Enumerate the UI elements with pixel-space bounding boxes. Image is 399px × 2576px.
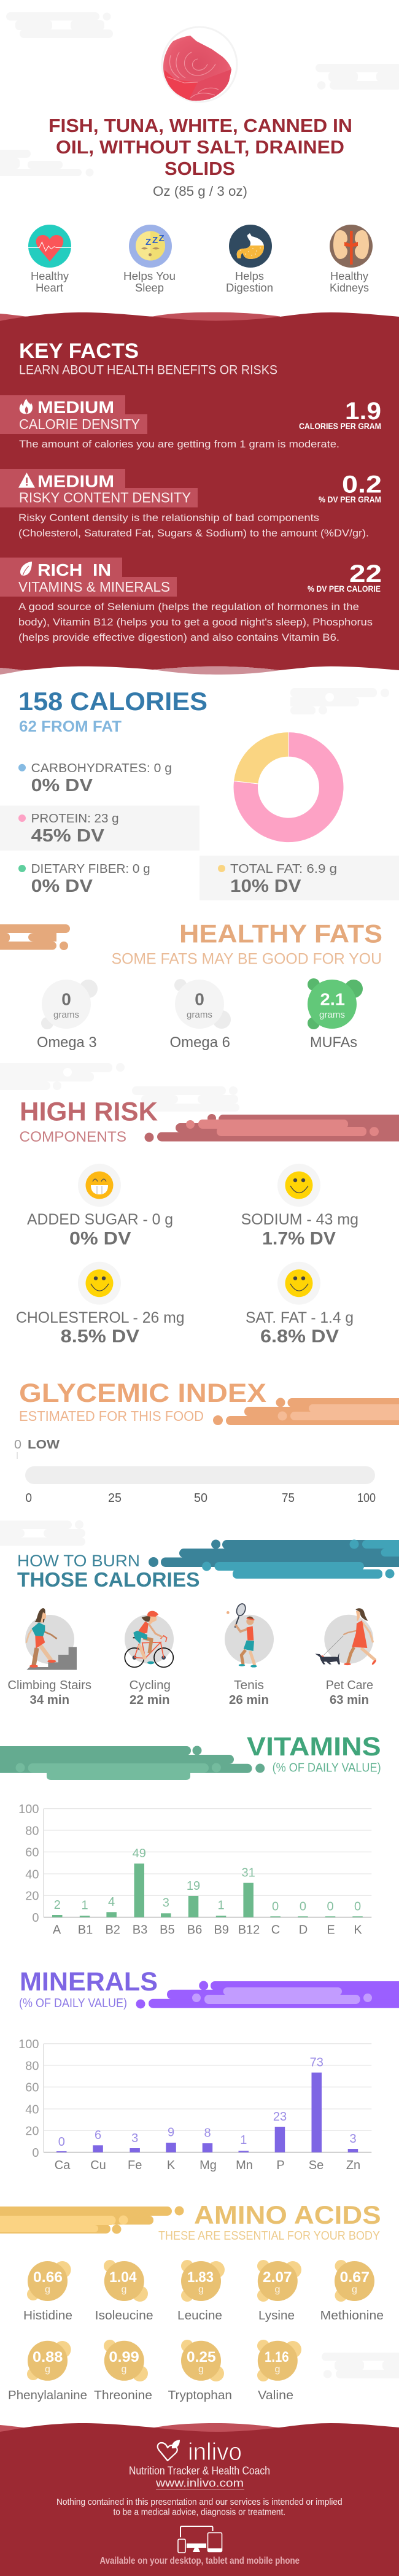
- title: [48, 115, 352, 179]
- title: OIL, WITHOUT SALT, DRAINED: [56, 136, 344, 158]
- item: saturated fat: [246, 1262, 354, 1347]
- icon: helps you sleep: Z: [152, 235, 158, 246]
- item: added sugar: ADDED SUGAR - 0 g: [27, 1211, 173, 1228]
- panel: how to burn those calories: [7, 1539, 399, 1707]
- chart: vitamins bar chart: 49: [133, 1847, 146, 1860]
- item: tryptophan: g: [198, 2364, 204, 2375]
- item: leucine: [177, 2260, 225, 2323]
- chart: vitamins bar chart: D: [299, 1924, 308, 1937]
- chart: minerals bar chart: 6: [95, 2129, 101, 2142]
- background cloud: calories: [290, 688, 389, 714]
- chart: vitamins bar chart: 40: [25, 1868, 39, 1881]
- chart: minerals bar chart: 0: [32, 2146, 39, 2160]
- fact: rich in vitamins and minerals: body), Vitamin B12 (helps you to get a good night's sleep), Phosphorus: [18, 616, 373, 628]
- heading: glycemic index: [19, 1379, 266, 1424]
- decoration: vitamins bars: [0, 1746, 265, 1780]
- item: omega 6: grams: [187, 1010, 212, 1020]
- fact: rich in vitamins and minerals: [0, 557, 382, 643]
- footer tagline: [129, 2465, 270, 2489]
- item: histidine: Histidine: [23, 2309, 72, 2323]
- chart: minerals bar chart: K: [167, 2159, 176, 2172]
- chart: calorie donut: [233, 732, 344, 843]
- item: omega 6: 0: [195, 989, 204, 1009]
- activity: climbing stairs: [7, 1608, 91, 1707]
- item: leucine: Leucine: [177, 2309, 222, 2323]
- item: methionine: Methionine: [320, 2309, 384, 2323]
- row: dietary fiber: [18, 862, 150, 896]
- activity: cycling: Cycling: [130, 1679, 171, 1692]
- benefit labels: Sleep: [135, 282, 164, 294]
- availability note: Available on your desktop, tablet and mobile phone: [99, 2556, 300, 2566]
- title: SOLIDS: [165, 158, 235, 179]
- background clouds: header: [0, 12, 399, 177]
- chart: minerals bar chart: Cu: [90, 2159, 106, 2172]
- chart: vitamins bar chart: 0: [300, 1900, 306, 1914]
- heading: glycemic index: ESTIMATED FOR THIS FOOD: [19, 1408, 204, 1424]
- logo: inlivo: inlivo: [188, 2439, 242, 2466]
- food image: tuna: [162, 27, 237, 104]
- heading: minerals: [19, 1967, 158, 2010]
- item: mufas: MUFAs: [310, 1034, 357, 1051]
- activity: climbing stairs: Climbing Stairs: [7, 1679, 91, 1692]
- background clouds: high risk: [0, 1063, 239, 1112]
- activity: pet care: [315, 1608, 377, 1707]
- fact: risky content density: (Cholesterol, Saturated Fat, Sugars & Sodium) to the amount (%DV/gr).: [18, 527, 369, 539]
- item: lysine: g: [275, 2284, 280, 2295]
- chart: minerals bar chart: Mn: [236, 2159, 253, 2172]
- panel: high risk components: [16, 1097, 399, 1347]
- chart: vitamins bar chart: C: [271, 1924, 280, 1937]
- chart: vitamins bar chart: B1: [78, 1924, 93, 1937]
- icon: healthy kidneys: [330, 225, 373, 268]
- item: mufas: 2.1: [320, 989, 345, 1009]
- item: isoleucine: 1.04: [109, 2269, 137, 2286]
- chart: vitamins bar chart: B9: [214, 1924, 229, 1937]
- fact: risky content density: [0, 469, 382, 539]
- benefit icons row: [28, 225, 373, 294]
- panel: key facts: [0, 312, 399, 675]
- decoration: healthy fats bars: [0, 924, 70, 950]
- item: phenylalanine: Phenylalanine: [8, 2389, 87, 2402]
- item: tryptophan: Tryptophan: [168, 2389, 232, 2402]
- icon: healthy heart: [28, 225, 71, 268]
- chart: vitamins bar chart: E: [327, 1924, 335, 1937]
- disclaimer: to be a medical advice, diagnosis or treatment.: [113, 2507, 285, 2518]
- item: threonine: 0.99: [109, 2349, 139, 2365]
- item: threonine: Threonine: [94, 2389, 152, 2402]
- item: omega 6: [169, 979, 231, 1051]
- chart: vitamins bar chart: 0: [327, 1900, 334, 1914]
- item: valine: g: [275, 2364, 280, 2375]
- chart: minerals bar chart: 23: [273, 2110, 287, 2124]
- fact: risky content density: RISKY CONTENT DENSITY: [19, 490, 191, 506]
- benefit labels: Healthy: [330, 270, 368, 282]
- chart: vitamins bar chart: 0: [272, 1900, 279, 1914]
- chart: glycemic gauge: 50: [194, 1491, 207, 1505]
- heading: key facts: LEARN ABOUT HEALTH BENEFITS OR RISKS: [19, 363, 277, 377]
- chart: minerals bar chart: 100: [18, 2038, 39, 2051]
- heading: vitamins: [247, 1732, 381, 1775]
- chart: vitamins bar chart: 60: [25, 1846, 39, 1860]
- item: lysine: Lysine: [258, 2309, 295, 2323]
- panel: amino acids: [0, 2200, 384, 2402]
- item: lysine: 2.07: [263, 2269, 292, 2286]
- chart: minerals bar chart: 20: [25, 2125, 39, 2138]
- item: added sugar: [27, 1164, 173, 1248]
- fact: risky content density: MEDIUM: [37, 471, 114, 490]
- row: dietary fiber: DIETARY FIBER: 0 g: [31, 862, 150, 876]
- chart: minerals bar chart: Mg: [200, 2159, 217, 2172]
- decoration: high risk bars: [145, 1114, 399, 1142]
- item: tryptophan: [168, 2340, 232, 2402]
- title: FISH, TUNA, WHITE, CANNED IN: [48, 115, 352, 136]
- item: cholesterol: [16, 1262, 185, 1347]
- item: threonine: [94, 2340, 152, 2402]
- chart: vitamins bar chart: [18, 1803, 371, 1937]
- item: valine: 1.16: [265, 2349, 289, 2365]
- chart: minerals bar chart: Ca: [55, 2159, 71, 2172]
- chart: minerals bar chart: Fe: [128, 2159, 142, 2172]
- icon: helps you sleep: Z: [158, 233, 165, 244]
- item: histidine: g: [45, 2284, 50, 2295]
- row: protein: PROTEIN: 23 g: [31, 812, 119, 826]
- chart: minerals bar chart: Zn: [346, 2159, 360, 2172]
- heading: vitamins: (% OF DAILY VALUE): [273, 1762, 381, 1775]
- heading: high risk: COMPONENTS: [20, 1129, 126, 1145]
- heading: how to burn those calories: THOSE CALORIES: [17, 1568, 200, 1591]
- item: methionine: 0.67: [340, 2269, 370, 2286]
- serving size: Oz (85 g / 3 oz): [153, 184, 247, 199]
- activity: climbing stairs: 34 min: [29, 1693, 69, 1707]
- row: carbohydrates: CARBOHYDRATES: 0 g: [31, 762, 172, 775]
- heading: how to burn those calories: HOW TO BURN: [17, 1552, 140, 1570]
- heading: key facts: KEY FACTS: [19, 339, 139, 363]
- item: omega 3: grams: [53, 1010, 79, 1020]
- heading: healthy fats: SOME FATS MAY BE GOOD FOR YOU: [112, 951, 382, 968]
- chart: vitamins bar chart: 2: [54, 1898, 61, 1912]
- chart: glycemic gauge: 75: [282, 1491, 295, 1505]
- fact: rich in vitamins and minerals: 22: [349, 560, 382, 587]
- item: leucine: 1.83: [187, 2269, 214, 2286]
- chart: vitamins bar chart: 3: [163, 1897, 169, 1910]
- benefit labels: Helps You: [123, 270, 176, 282]
- decoration: burn bars: [149, 1539, 399, 1579]
- fact: calorie density: [0, 395, 381, 450]
- chart: vitamins bar chart: 1: [81, 1899, 88, 1913]
- decoration: minerals bars: [136, 1981, 399, 2008]
- fact: risky content density: 0.2: [342, 471, 382, 498]
- footer tagline: www.inlivo.com: [155, 2477, 244, 2489]
- chart: vitamins bar chart: B3: [133, 1924, 147, 1937]
- heading: amino acids: THESE ARE ESSENTIAL FOR YOUR BODY: [158, 2229, 380, 2243]
- chart: minerals bar chart: P: [276, 2159, 285, 2172]
- benefit labels: Heart: [36, 282, 63, 294]
- panel: glycemic index: [14, 1379, 399, 1505]
- fact: calorie density: The amount of calories you are getting from 1 gram is moderate.: [19, 438, 339, 450]
- activity: tennis: [225, 1603, 274, 1707]
- chart: vitamins bar chart: A: [53, 1924, 61, 1937]
- item: histidine: [23, 2261, 72, 2323]
- panel: healthy fats: [0, 919, 382, 1051]
- item: isoleucine: Isoleucine: [95, 2309, 153, 2323]
- chart: vitamins bar chart: K: [354, 1924, 362, 1937]
- fact: risky content density: Risky Content density is the relationship of bad components: [18, 512, 319, 524]
- footer tagline: Nutrition Tracker & Health Coach: [129, 2465, 270, 2477]
- item: omega 6: Omega 6: [169, 1034, 230, 1051]
- item: valine: [257, 2340, 301, 2402]
- heading: healthy fats: [112, 919, 382, 968]
- row: carbohydrates: [18, 762, 172, 795]
- chart: minerals bar chart: 73: [310, 2056, 323, 2070]
- heading: how to burn those calories: [17, 1552, 200, 1591]
- icon: helps digestion: [229, 225, 272, 268]
- item: isoleucine: g: [122, 2284, 126, 2295]
- item: tryptophan: 0.25: [187, 2349, 216, 2365]
- item: isoleucine: [95, 2260, 153, 2323]
- row: protein: 45% DV: [31, 826, 105, 846]
- chart: minerals bar chart: 60: [25, 2081, 39, 2095]
- logo: inlivo: [158, 2439, 242, 2466]
- disclaimer: Nothing contained in this presentation and our services is intended or implied: [56, 2497, 343, 2507]
- heading: calories: 62 FROM FAT: [19, 718, 122, 735]
- item: mufas: [308, 978, 363, 1051]
- fact: rich in vitamins and minerals: VITAMINS & MINERALS: [18, 579, 170, 595]
- fact: rich in vitamins and minerals: (helps provide effective digestion) and also contains Vitamin B6.: [18, 632, 339, 643]
- decoration: glycemic bars: [213, 1398, 399, 1425]
- item: phenylalanine: 0.88: [33, 2349, 63, 2365]
- activity: pet care: Pet Care: [326, 1679, 373, 1692]
- chart: minerals bar chart: 8: [204, 2127, 211, 2140]
- item: mufas: grams: [319, 1010, 345, 1020]
- chart: vitamins bar chart: 20: [25, 1890, 39, 1903]
- icon: devices: [178, 2526, 222, 2553]
- activity: tennis: Tenis: [234, 1679, 264, 1692]
- chart: glycemic gauge: 0: [26, 1491, 32, 1505]
- chart: minerals bar chart: 80: [25, 2060, 39, 2073]
- chart: vitamins bar chart: 0: [354, 1900, 361, 1914]
- chart: vitamins bar chart: 80: [25, 1824, 39, 1838]
- heading: minerals: MINERALS: [20, 1967, 158, 1997]
- chart: vitamins bar chart: 100: [18, 1803, 39, 1816]
- fact: rich in vitamins and minerals: % DV PER CALORIE: [308, 584, 381, 594]
- chart: vitamins bar chart: 1: [217, 1899, 225, 1913]
- fact: rich in vitamins and minerals: RICH IN: [37, 560, 111, 579]
- item: phenylalanine: [8, 2341, 87, 2402]
- item: saturated fat: 6.8% DV: [260, 1326, 339, 1347]
- activity: cycling: [125, 1611, 174, 1707]
- heading: vitamins: VITAMINS: [247, 1732, 381, 1762]
- item: omega 3: [37, 980, 98, 1051]
- fact: risky content density: % DV PER GRAM: [319, 495, 381, 505]
- item: phenylalanine: g: [45, 2364, 50, 2375]
- decoration: amino bars: [0, 2206, 184, 2234]
- chart: minerals bar chart: 9: [168, 2126, 174, 2140]
- chart: vitamins bar chart: B12: [238, 1924, 260, 1937]
- heading: minerals: (% OF DAILY VALUE): [19, 1997, 127, 2010]
- icon: helps you sleep: [129, 225, 172, 268]
- chart: vitamins bar chart: B6: [187, 1924, 202, 1937]
- benefit labels: Healthy: [31, 270, 69, 282]
- heading: high risk: HIGH RISK: [20, 1097, 158, 1127]
- heading: calories: [18, 687, 207, 735]
- item: cholesterol: 8.5% DV: [61, 1326, 139, 1347]
- chart: vitamins bar chart: 0: [32, 1911, 39, 1925]
- chart: vitamins bar chart: 4: [108, 1895, 115, 1909]
- fact: calorie density: CALORIE DENSITY: [19, 416, 140, 432]
- disclaimer: [56, 2497, 343, 2518]
- row: carbohydrates: 0% DV: [31, 776, 93, 795]
- item: valine: Valine: [258, 2389, 293, 2402]
- item: methionine: g: [352, 2284, 357, 2295]
- heading: amino acids: [158, 2200, 381, 2243]
- benefit labels: Digestion: [226, 282, 273, 294]
- heading: healthy fats: HEALTHY FATS: [179, 919, 382, 948]
- item: histidine: 0.66: [33, 2269, 63, 2286]
- background cloud: amino acids: [322, 2353, 399, 2378]
- fact: calorie density: MEDIUM: [37, 398, 114, 417]
- row: total fat: [200, 856, 399, 900]
- item: omega 3: 0: [61, 989, 71, 1009]
- heading: key facts: [19, 339, 277, 377]
- benefit labels: [31, 270, 369, 294]
- chart: minerals bar chart: 0: [58, 2135, 65, 2149]
- item: added sugar: 0% DV: [69, 1229, 131, 1248]
- row: dietary fiber: 0% DV: [31, 876, 93, 896]
- heading: glycemic index: GLYCEMIC INDEX: [19, 1379, 266, 1408]
- item: leucine: g: [198, 2284, 204, 2295]
- row: total fat: 10% DV: [230, 876, 301, 896]
- item: threonine: g: [122, 2364, 126, 2375]
- item: sodium: SODIUM - 43 mg: [241, 1211, 358, 1228]
- fact: rich in vitamins and minerals: A good source of Selenium (helps the regulation of hormones in the: [18, 601, 359, 613]
- chart: minerals bar chart: 3: [131, 2132, 138, 2145]
- heading: high risk: [20, 1097, 158, 1145]
- chart: glycemic gauge: 100: [357, 1491, 376, 1505]
- row: protein: [0, 805, 200, 851]
- fact: calorie density: CALORIES PER GRAM: [299, 421, 381, 431]
- fact: calorie density: 1.9: [345, 398, 381, 425]
- panel: vitamins: [0, 1732, 381, 1937]
- item: saturated fat: SAT. FAT - 1.4 g: [246, 1309, 354, 1326]
- activity: cycling: 22 min: [130, 1693, 169, 1707]
- item: methionine: [320, 2260, 384, 2323]
- chart: glycemic gauge: 25: [108, 1491, 122, 1505]
- item: omega 3: Omega 3: [37, 1034, 97, 1051]
- row: total fat: TOTAL FAT: 6.9 g: [230, 862, 337, 876]
- activity: tennis: 26 min: [229, 1693, 269, 1707]
- background cloud: burn calories: [0, 1520, 85, 1546]
- icon: helps you sleep: Z: [145, 237, 151, 247]
- chart: minerals bar chart: 40: [25, 2103, 39, 2116]
- activity: pet care: 63 min: [330, 1693, 369, 1707]
- panel: minerals: [18, 1967, 399, 2172]
- chart: minerals bar chart: [18, 2038, 371, 2172]
- chart: vitamins bar chart: B2: [105, 1924, 120, 1937]
- item: cholesterol: CHOLESTEROL - 26 mg: [16, 1309, 185, 1326]
- panel: footer: [0, 2423, 399, 2576]
- heading: calories: 158 CALORIES: [18, 687, 207, 716]
- heading: amino acids: AMINO ACIDS: [194, 2200, 381, 2229]
- chart: vitamins bar chart: 31: [241, 1866, 255, 1879]
- chart: vitamins bar chart: B5: [160, 1924, 175, 1937]
- chart: glycemic gauge: LOW: [28, 1438, 60, 1452]
- chart: minerals bar chart: 3: [349, 2132, 357, 2146]
- item: lysine: [257, 2260, 301, 2323]
- chart: glycemic gauge: 0: [14, 1438, 21, 1452]
- panel: calories: [0, 687, 399, 900]
- chart: minerals bar chart: Se: [309, 2159, 323, 2172]
- benefit labels: Helps: [235, 270, 264, 282]
- chart: glycemic gauge: [14, 1438, 376, 1505]
- chart: minerals bar chart: 1: [240, 2133, 247, 2147]
- benefit labels: Kidneys: [330, 282, 369, 294]
- item: sodium: [241, 1164, 358, 1248]
- item: sodium: 1.7% DV: [262, 1229, 336, 1248]
- chart: vitamins bar chart: 19: [187, 1879, 200, 1893]
